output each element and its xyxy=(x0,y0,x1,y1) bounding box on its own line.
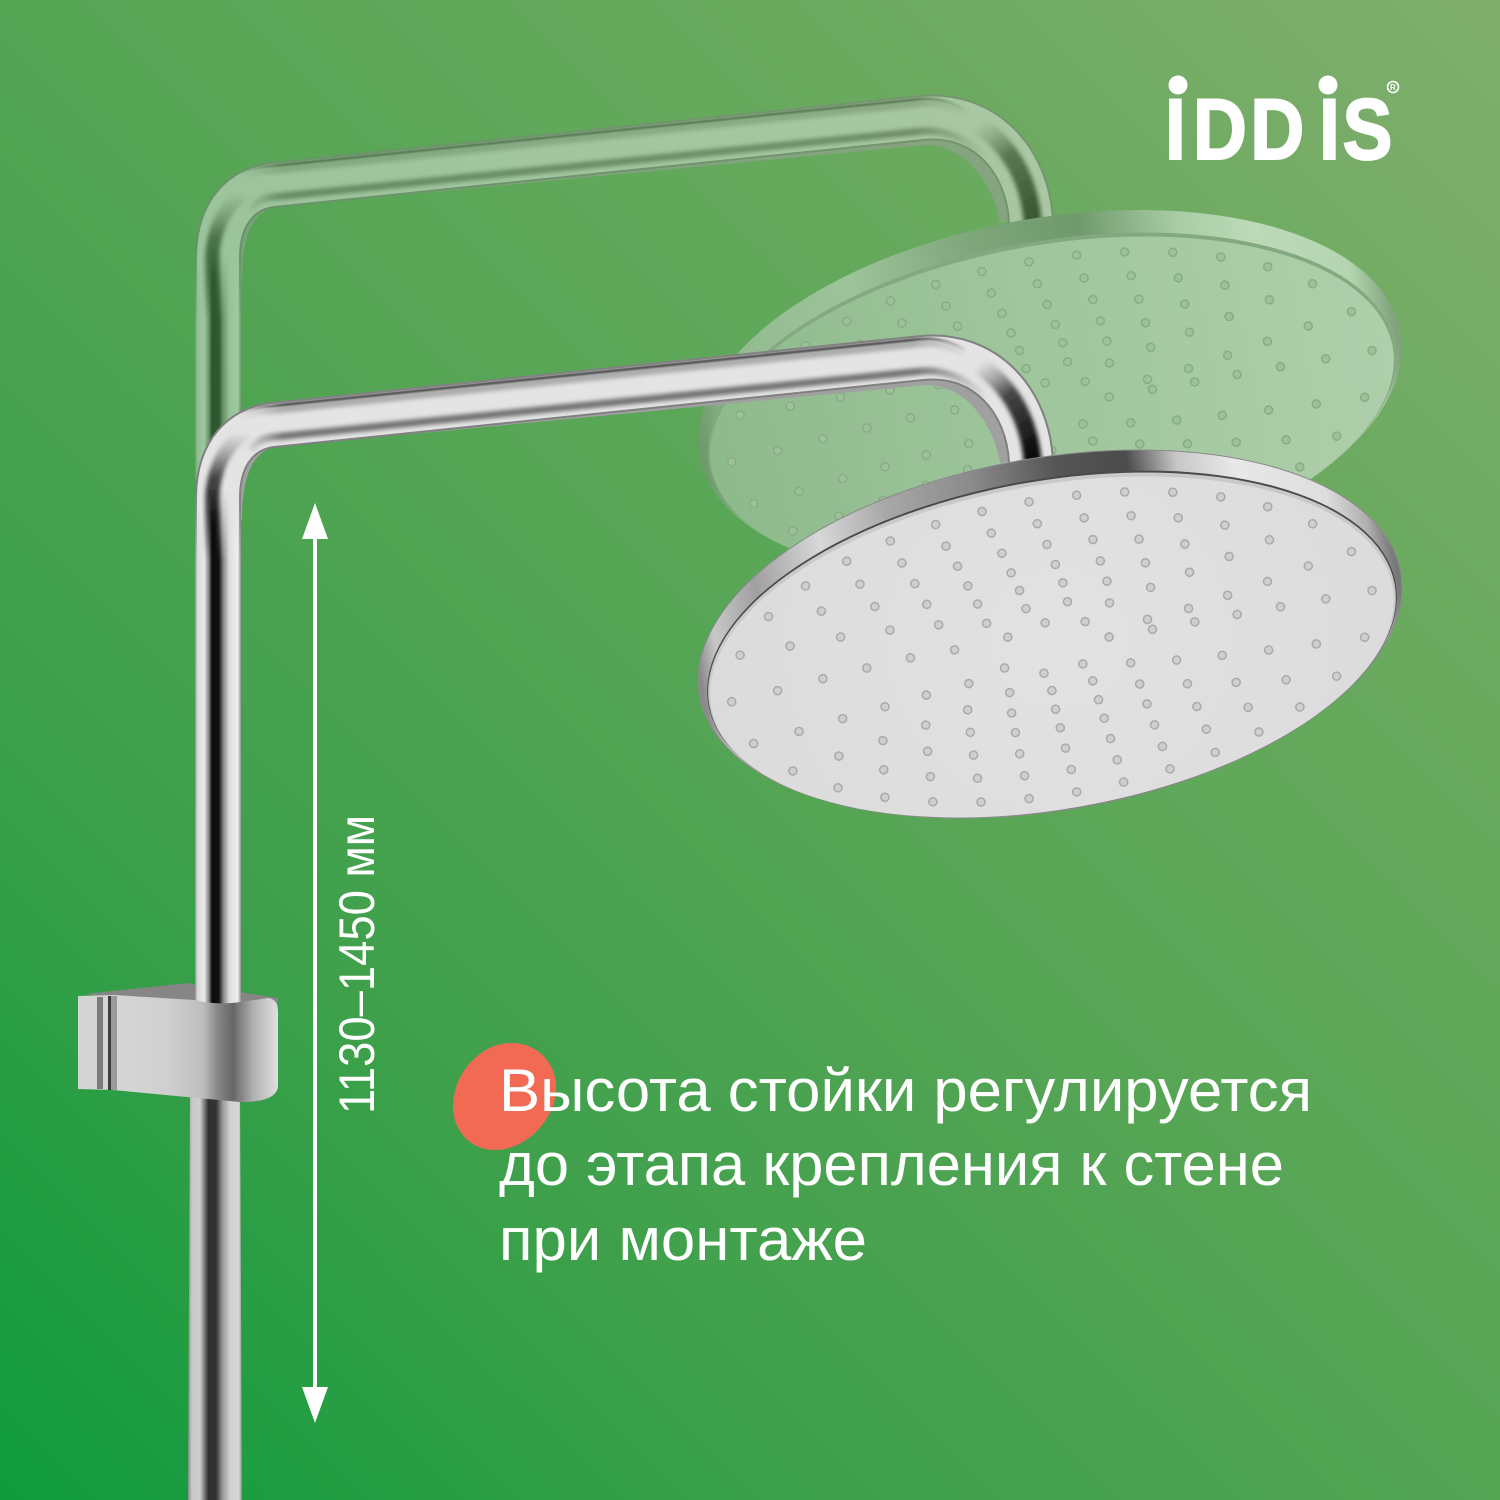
logo: iddis: IDDIS xyxy=(1165,82,1392,178)
shower head: lowered position xyxy=(669,399,1431,869)
ghost shower arm: upper position xyxy=(195,99,1033,480)
wall bracket clamp xyxy=(78,982,278,1102)
logo: iddis: R xyxy=(1390,83,1396,92)
description text: до этапа крепления к стене xyxy=(499,1131,1284,1198)
dimension arrow xyxy=(302,503,328,1423)
shower arm: lowered position xyxy=(195,339,1033,720)
description text: Высота стойки регулируется xyxy=(499,1057,1312,1124)
description text xyxy=(499,1057,1312,1273)
coral accent blob xyxy=(453,1043,556,1150)
ghost shower head: upper position xyxy=(669,159,1431,629)
shower riser tube: lower section xyxy=(188,715,242,1500)
description text: при монтаже xyxy=(499,1206,867,1273)
dimension label: 1130–1450 мм xyxy=(329,815,385,1114)
